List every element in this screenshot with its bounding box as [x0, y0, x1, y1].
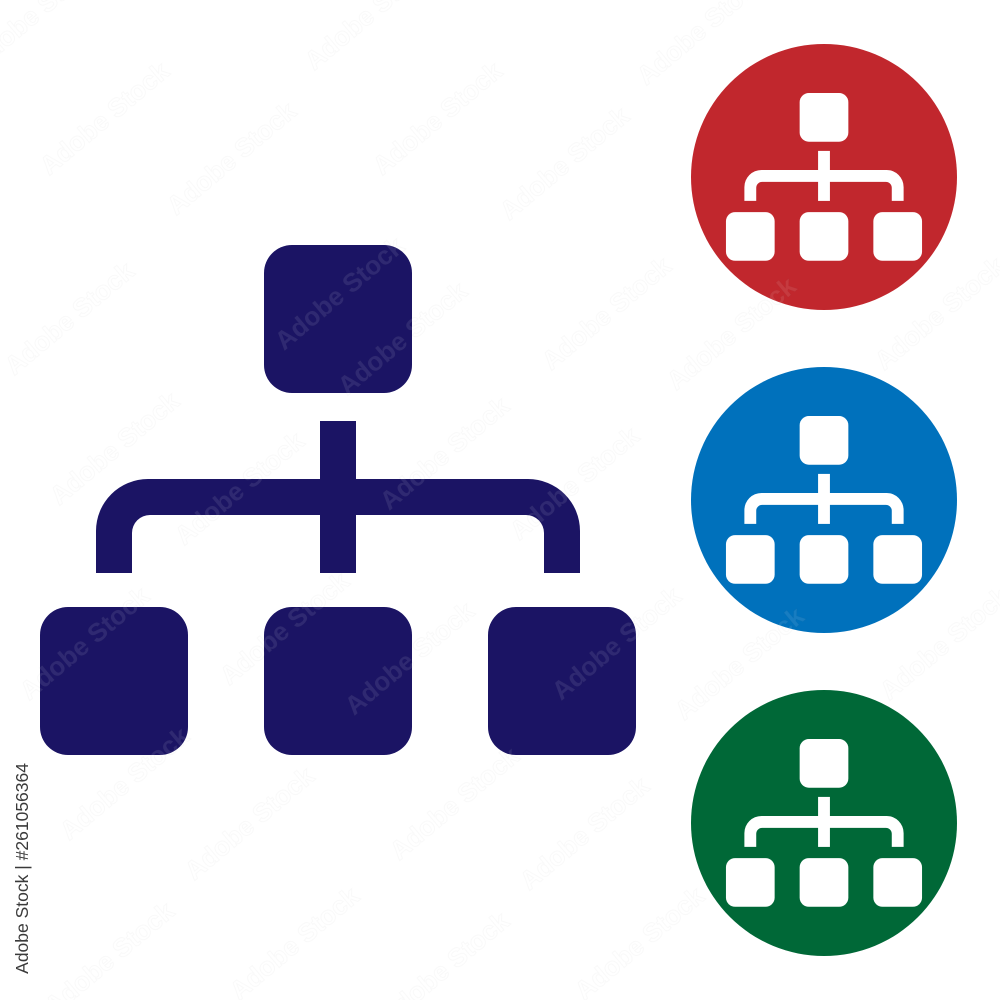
faint watermarks: Adobe Stock	[269, 230, 410, 356]
faint watermarks: Adobe Stock	[661, 270, 802, 396]
faint watermarks: Adobe Stock	[384, 740, 525, 866]
faint watermarks: Adobe Stock	[536, 250, 677, 376]
side credit text: Adobe Stock | #261056364	[12, 763, 32, 974]
faint watermarks: Adobe Stock	[14, 580, 155, 706]
green circle	[691, 690, 957, 956]
main hierarchy icon	[40, 245, 636, 755]
faint watermarks: Adobe Stock	[367, 55, 508, 181]
faint watermarks: Adobe Stock	[504, 420, 645, 546]
red circle icon	[691, 44, 957, 310]
faint watermarks: Adobe Stock	[54, 720, 195, 846]
red circle	[691, 44, 957, 310]
faint watermarks: Adobe Stock	[339, 595, 480, 721]
green circle icon	[691, 690, 957, 956]
faint watermarks: Adobe Stock	[44, 385, 185, 511]
white hierarchy glyph	[726, 93, 922, 261]
top node	[264, 245, 412, 393]
faint watermarks: Adobe Stock	[374, 390, 515, 516]
faint watermarks: Adobe Stock	[0, 255, 140, 381]
faint watermarks: Adobe Stock	[169, 425, 310, 551]
faint watermarks: Adobe Stock	[161, 95, 302, 221]
connector vertical	[320, 421, 356, 573]
bottom left node	[40, 607, 188, 755]
faint watermarks: Adobe Stock	[179, 760, 320, 886]
white hierarchy glyph	[726, 739, 922, 907]
faint watermarks: Adobe Stock	[332, 275, 473, 401]
faint watermarks: Adobe Stock	[669, 600, 810, 726]
connector branch	[96, 479, 580, 573]
bottom middle node	[264, 607, 412, 755]
blue circle icon	[691, 367, 957, 633]
faint watermarks: Adobe Stock	[546, 580, 687, 706]
faint watermarks: Adobe Stock	[34, 55, 175, 181]
faint watermarks: Adobe Stock	[494, 100, 635, 226]
bottom right node	[488, 607, 636, 755]
white hierarchy glyph	[726, 416, 922, 584]
faint watermarks: Adobe Stock	[214, 565, 355, 691]
blue circle	[691, 367, 957, 633]
faint watermarks: Adobe Stock	[514, 770, 655, 896]
